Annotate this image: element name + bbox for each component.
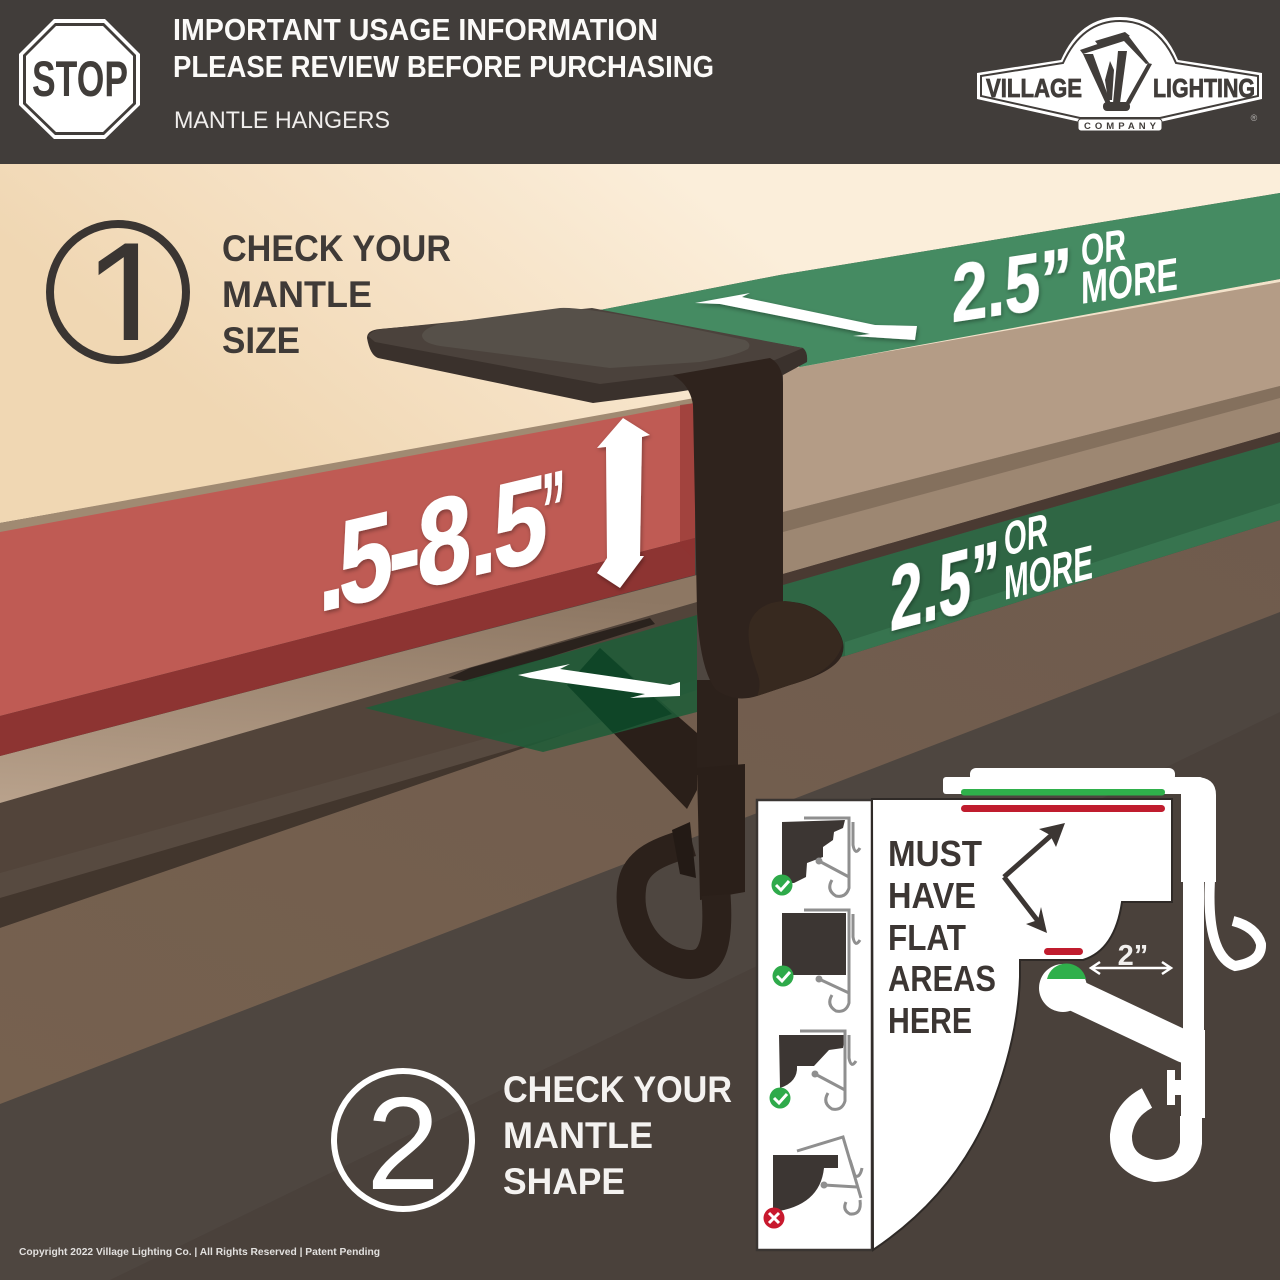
- hanger strap with curl: [673, 358, 844, 698]
- lower hook: [631, 842, 717, 965]
- icon: stop sign: [19, 19, 140, 139]
- dimension: 2 inch gap: 2”: [1118, 940, 1148, 972]
- logo: Village Lighting Company: VILLAGE: [986, 73, 1082, 103]
- example: stepped cove ok: [770, 1031, 856, 1109]
- step 1 heading: [222, 228, 451, 361]
- hanger arm behind green plane: [567, 648, 697, 809]
- dimension label: upper OR: OR: [1081, 220, 1126, 276]
- callout: flat areas text: [888, 833, 996, 1041]
- callout: flat areas text: AREAS: [888, 958, 996, 999]
- step 1 number badge: [46, 220, 190, 364]
- red zone: mantle thickness: [0, 403, 695, 756]
- lantern mark: [1080, 32, 1152, 111]
- callout: flat areas text: FLAT: [888, 917, 966, 958]
- step 1 number badge: 1: [83, 209, 173, 390]
- logo: Village Lighting Company: ®: [1251, 113, 1258, 123]
- header title: PLEASE REVIEW BEFORE PURCHASING: [173, 49, 714, 84]
- step 1 heading: MANTLE: [222, 274, 372, 315]
- example: square mantle ok: [772, 910, 860, 1011]
- dimension label: upper 2.5 inch: 2.5”: [952, 230, 1072, 340]
- hook knob: [672, 822, 696, 878]
- dimension label: thickness: .5-8.5: [318, 448, 547, 638]
- hanger stem and sleeve: [697, 680, 745, 900]
- arrow: vertical thickness double arrow: [597, 418, 650, 588]
- bracket slit under mantle: [448, 618, 655, 682]
- logo: Village Lighting Company: [977, 17, 1262, 132]
- step 2 heading: CHECK YOUR: [503, 1069, 732, 1110]
- callout: flat areas text: HAVE: [888, 875, 976, 916]
- step 2 number badge: 2: [366, 1070, 440, 1217]
- dimension label: thickness: ”: [541, 446, 566, 575]
- step 1 heading: CHECK YOUR: [222, 228, 451, 269]
- step 2 heading: SHAPE: [503, 1161, 625, 1202]
- header title: IMPORTANT USAGE INFORMATION: [173, 12, 658, 47]
- arrow: upper depth double arrow: [695, 293, 917, 340]
- hanger top plate side: [367, 310, 807, 403]
- header title: [173, 12, 714, 84]
- red bar: top surface: [961, 805, 1165, 812]
- step 2 heading: MANTLE: [503, 1115, 653, 1156]
- hanger top pad: [422, 308, 749, 368]
- curl highlight: [749, 601, 843, 696]
- panel: mantle profile diagram: [872, 799, 1172, 1250]
- arrow: lower depth double arrow: [518, 664, 680, 698]
- header subtitle: MANTLE HANGERS: [174, 107, 390, 134]
- step 2 number badge: [334, 1070, 472, 1217]
- logo: Village Lighting Company: COMPANY: [1084, 121, 1157, 132]
- example: rounded mantle not ok: [764, 1137, 862, 1228]
- logo: Village Lighting Company: LIGHTING: [1153, 73, 1255, 103]
- callout: flat areas text: MUST: [888, 833, 982, 874]
- red bar: lower surface: [1044, 948, 1083, 955]
- green plane: underside clearance: [365, 615, 697, 752]
- dimension label: lower MORE: MORE: [1004, 535, 1093, 611]
- step 2 heading: [503, 1069, 732, 1202]
- panel: mantle shape examples: [757, 800, 872, 1250]
- green zone: upper 2.5 inch flat top: [600, 193, 1280, 367]
- example: crown molding ok: [772, 818, 860, 896]
- hanger top plate surface: [368, 308, 803, 384]
- dimension: 2 inch gap: [1091, 940, 1171, 974]
- diagram: white hanger outline: [943, 768, 1261, 1171]
- callout: flat areas text: HERE: [888, 1000, 972, 1041]
- dimension label: upper MORE: MORE: [1081, 248, 1178, 314]
- header bar: [0, 0, 1280, 164]
- step 1 heading: SIZE: [222, 320, 300, 361]
- dimension label: lower 2.5 inch: 2.5”: [890, 522, 1000, 651]
- icon: stop sign: STOP: [32, 51, 128, 107]
- green zone: lower 2.5 inch underside: [783, 442, 1280, 670]
- copyright line: Copyright 2022 Village Lighting Co. | All Rights Reserved | Patent Pending: [19, 1246, 380, 1258]
- arrows: pointing to flat areas: [1004, 823, 1065, 933]
- mantle hanger: [367, 308, 844, 965]
- dimension label: lower OR: OR: [1004, 504, 1048, 567]
